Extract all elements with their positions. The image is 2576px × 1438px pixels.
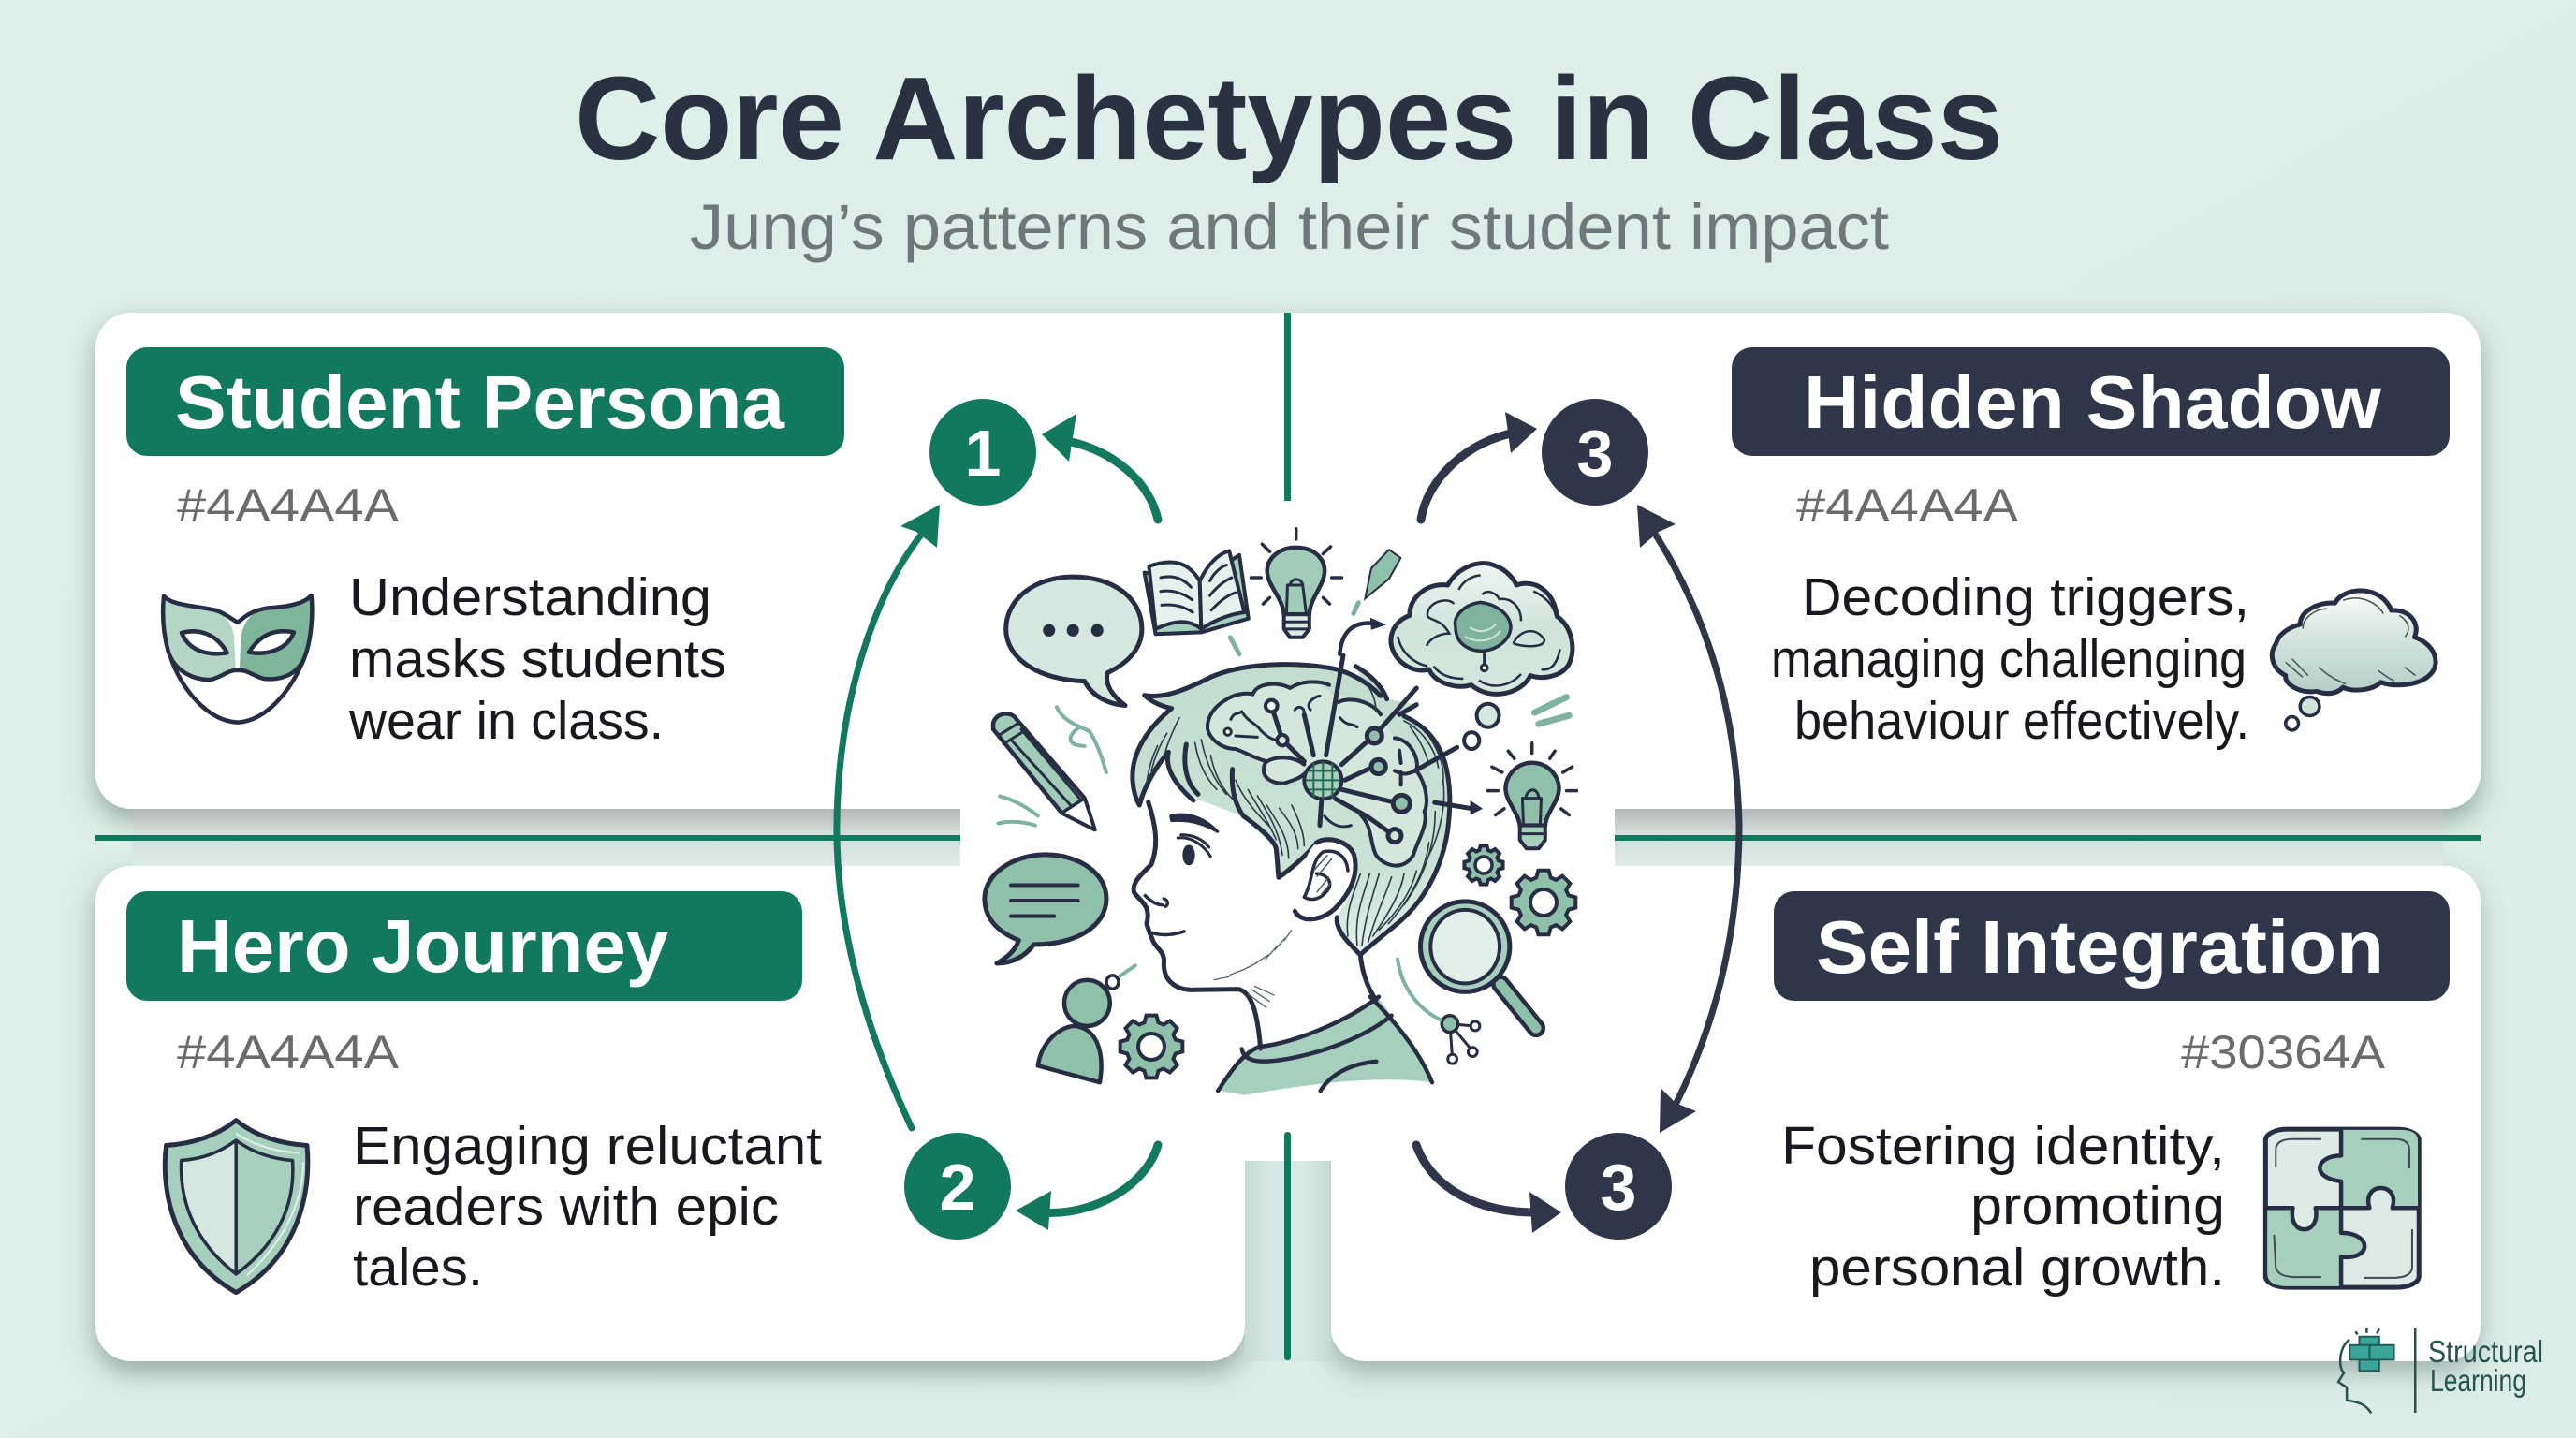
icon: magnifying glass: [1420, 902, 1536, 1028]
logo divider: [2414, 1328, 2417, 1413]
arrow: top right short arrow: [1421, 412, 1537, 520]
neural network: [1224, 655, 1457, 843]
icon: brush shape: [1365, 550, 1400, 598]
arrow: big dark cycle arrow: [1637, 505, 1739, 1133]
vertical divider top: [1284, 313, 1291, 501]
logo text: Learning: [2430, 1363, 2526, 1398]
logo cross: [2349, 1337, 2394, 1371]
illustration: head, hair and brain: [1133, 655, 1457, 1049]
description: Decoding triggers,: [1802, 567, 2249, 627]
icon: gear small: [1464, 845, 1503, 885]
panel: Hidden Shadow: [1732, 347, 2450, 751]
description: [348, 567, 726, 751]
panel: Self Integration: [1774, 891, 2450, 1298]
icon: thought cloud: [2272, 591, 2436, 730]
green accent dashes: [1230, 603, 1358, 654]
heading: Hero Journey: Hero Journey: [177, 904, 669, 988]
heading: Self Integration: Self Integration: [1816, 905, 2384, 989]
vertical divider bottom: [1284, 1132, 1291, 1360]
horizontal divider left: [95, 835, 960, 841]
face profile: [1134, 802, 1376, 1049]
eye and brow: [1171, 814, 1218, 865]
brain: [1208, 683, 1427, 866]
arrow: idea curve to cloud: [1339, 618, 1386, 654]
panel: Student Persona: [126, 347, 844, 751]
logo head outline: [2338, 1340, 2371, 1414]
description: personal growth.: [1809, 1238, 2225, 1298]
brain outline: [1208, 682, 1427, 866]
arrow: bottom left short arrow: [1016, 1145, 1158, 1230]
colour code: #30364A: [2181, 1026, 2386, 1078]
panel: Hero Journey: [126, 891, 822, 1298]
logo text: Structural: [2428, 1334, 2543, 1369]
hair fill: [1133, 665, 1450, 955]
description: [1781, 1116, 2225, 1298]
logo rays: [2355, 1328, 2379, 1334]
heading: Student Persona: Student Persona: [175, 360, 785, 444]
arrow: big green cycle arrow: [837, 505, 940, 1128]
icon: puzzle: [2265, 1129, 2419, 1287]
description: tales.: [353, 1238, 483, 1298]
green accent squiggles: [999, 707, 1106, 826]
panel: bottom right card background: [1330, 866, 2481, 1361]
icon: shield: [165, 1121, 308, 1293]
nose and mouth: [1145, 896, 1184, 934]
heading: Hero Journey: [126, 891, 802, 1001]
shadow band between cards left: [133, 809, 960, 866]
description: promoting: [1970, 1176, 2225, 1236]
gear small hub: [1475, 857, 1492, 873]
hair strands: [1147, 683, 1444, 946]
icon: mask: [163, 595, 312, 723]
number badge 3 top: 3: [1577, 417, 1613, 490]
icon: person: [1038, 965, 1135, 1082]
gear bottom hub: [1138, 1034, 1164, 1060]
description: readers with epic: [353, 1177, 779, 1237]
number badge 3 bottom: [1565, 1133, 1672, 1240]
number badge 2: [904, 1133, 1011, 1240]
icon: network: [1398, 960, 1480, 1064]
panel: bottom left card background: [95, 866, 1245, 1361]
number badge 3 bottom: 3: [1601, 1151, 1636, 1224]
number badge 1: 1: [965, 417, 1001, 490]
icon: gear bottom: [1120, 1016, 1182, 1078]
heading: Hidden Shadow: [1732, 347, 2450, 456]
arrow: bottom right short arrow: [1416, 1145, 1561, 1233]
jaw hatching: [1214, 930, 1292, 1008]
title: Core Archetypes in Class: [575, 52, 2003, 184]
icon: gear large: [1512, 871, 1575, 934]
arrow: idea to bulb: [1435, 800, 1483, 815]
icon: storm thought cloud: [1391, 564, 1573, 694]
heading: Self Integration: [1774, 891, 2450, 1001]
number badge 2: 2: [940, 1151, 975, 1224]
icon: book: [1145, 550, 1249, 634]
logo: Structural Learning: [2338, 1328, 2543, 1414]
colour code: #4A4A4A: [1796, 479, 2019, 532]
description: [353, 1116, 822, 1298]
description: Understanding: [349, 567, 711, 627]
icon: light bulb top: [1251, 529, 1341, 638]
colour code: #4A4A4A: [177, 479, 400, 532]
heading: Hidden Shadow: Hidden Shadow: [1804, 360, 2382, 444]
gap between lower cards: [1245, 1161, 1331, 1361]
number badge 1: [929, 399, 1036, 506]
icon: speech bubble with dots: [1006, 577, 1142, 706]
description: masks students: [349, 629, 726, 689]
horizontal divider right: [1615, 835, 2481, 841]
gear large hub: [1530, 889, 1557, 916]
logo text: [2428, 1334, 2543, 1398]
description: managing challenging: [1771, 629, 2247, 689]
arrow: top left short arrow: [1042, 414, 1158, 520]
description: Engaging reluctant: [353, 1116, 822, 1176]
illustration: shirt: [1218, 997, 1432, 1095]
colour code: #4A4A4A: [177, 1026, 400, 1078]
description: wear in class.: [348, 691, 664, 751]
description: [1771, 567, 2249, 751]
icon: light bulb right: [1488, 743, 1576, 848]
panel: central white area: [960, 313, 1615, 1161]
green accent marks right: [1534, 697, 1569, 724]
icon: pencil: [993, 713, 1095, 829]
ear: [1295, 840, 1355, 919]
icon: speech bubble with lines: [985, 855, 1106, 963]
hair outline: [1133, 665, 1450, 955]
thought bubbles: [1464, 704, 1499, 749]
description: Fostering identity,: [1781, 1116, 2225, 1176]
subtitle: Jung’s patterns and their student impact: [690, 191, 1889, 263]
central illustration: child with thoughts: [985, 529, 1576, 1095]
description: behaviour effectively.: [1794, 691, 2249, 751]
heading: Student Persona: [126, 347, 844, 456]
panel: top card background: [95, 313, 2481, 809]
shadow band between cards right: [1615, 809, 2443, 866]
number badge 3 top: [1542, 399, 1648, 506]
